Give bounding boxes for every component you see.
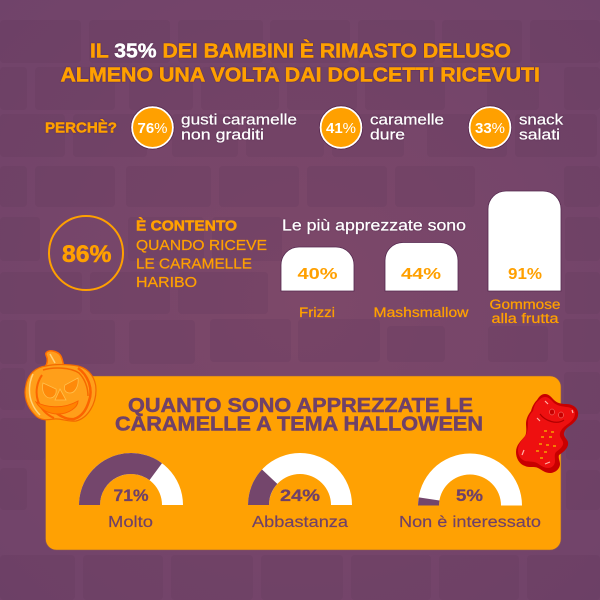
bar: frizzi: 40% (298, 266, 338, 283)
text block: è contento: QUANDO RICEVE (136, 237, 267, 254)
stat: caramelle dure: dure (370, 128, 405, 144)
bar: mashsmallow: Mashsmallow (374, 305, 469, 320)
stat: gusti caramelle non graditi: gusti caramelle (181, 112, 297, 128)
bar: gommose alla frutta (488, 191, 561, 326)
title (60, 39, 540, 87)
stat ring: 86% (49, 216, 123, 290)
bar: mashsmallow: 44% (401, 266, 441, 283)
text block: è contento: LE CARAMELLE (136, 256, 252, 272)
gauge: molto 71%: Molto (108, 514, 153, 531)
stat: snack salati: 33% (475, 120, 505, 137)
bar: gommose alla frutta: alla frutta (492, 311, 559, 326)
gauge: abbastanza 24% (248, 453, 352, 531)
stat: caramelle dure: caramelle (370, 112, 444, 128)
heading: perché: PERCHÈ? (45, 120, 117, 137)
icon: gummy bear (516, 394, 578, 473)
gauge: abbastanza 24%: 24% (280, 487, 320, 505)
gauge: non è interessato 5% (399, 454, 541, 531)
stat: gusti caramelle non graditi (131, 106, 297, 149)
gauge: molto 71% (79, 453, 183, 531)
stat: snack salati: snack (519, 112, 564, 128)
chart heading: Le più apprezzate sono (282, 218, 466, 235)
bar: mashsmallow (374, 242, 469, 320)
bar chart (281, 191, 561, 326)
stat: caramelle dure (319, 106, 444, 149)
bar: gommose alla frutta: Gommose (490, 297, 560, 312)
stat: gusti caramelle non graditi: non graditi (181, 128, 264, 144)
gauge: non è interessato 5%: 5% (456, 487, 483, 505)
text block: è contento: HARIBO (136, 274, 197, 291)
stat ring: 86%: 86% (62, 241, 112, 268)
text block: è contento (136, 218, 267, 291)
bar: frizzi (281, 247, 354, 320)
title: ALMENO UNA VOLTA DAI DOLCETTI RICEVUTI (60, 65, 540, 87)
panel heading: CARAMELLE A TEMA HALLOWEEN (115, 413, 483, 436)
gauge: abbastanza 24%: Abbastanza (252, 514, 348, 531)
stat: snack salati: salati (519, 128, 560, 144)
icon: pumpkin (25, 351, 96, 421)
gauge: non è interessato 5%: Non è interessato (399, 514, 541, 531)
bar: frizzi: Frizzi (299, 305, 335, 320)
stat: gusti caramelle non graditi: 76% (138, 120, 168, 137)
panel: halloween (46, 376, 561, 550)
stat: snack salati (468, 106, 564, 149)
title: IL 35% DEI BAMBINI È RIMASTO DELUSO (90, 39, 511, 62)
bar: gommose alla frutta: 91% (508, 266, 542, 283)
stat: caramelle dure: 41% (326, 120, 356, 137)
text block: è contento: È CONTENTO (136, 218, 237, 235)
panel heading (115, 394, 483, 436)
gauge: molto 71%: 71% (114, 487, 149, 505)
panel heading: QUANTO SONO APPREZZATE LE (128, 394, 473, 417)
